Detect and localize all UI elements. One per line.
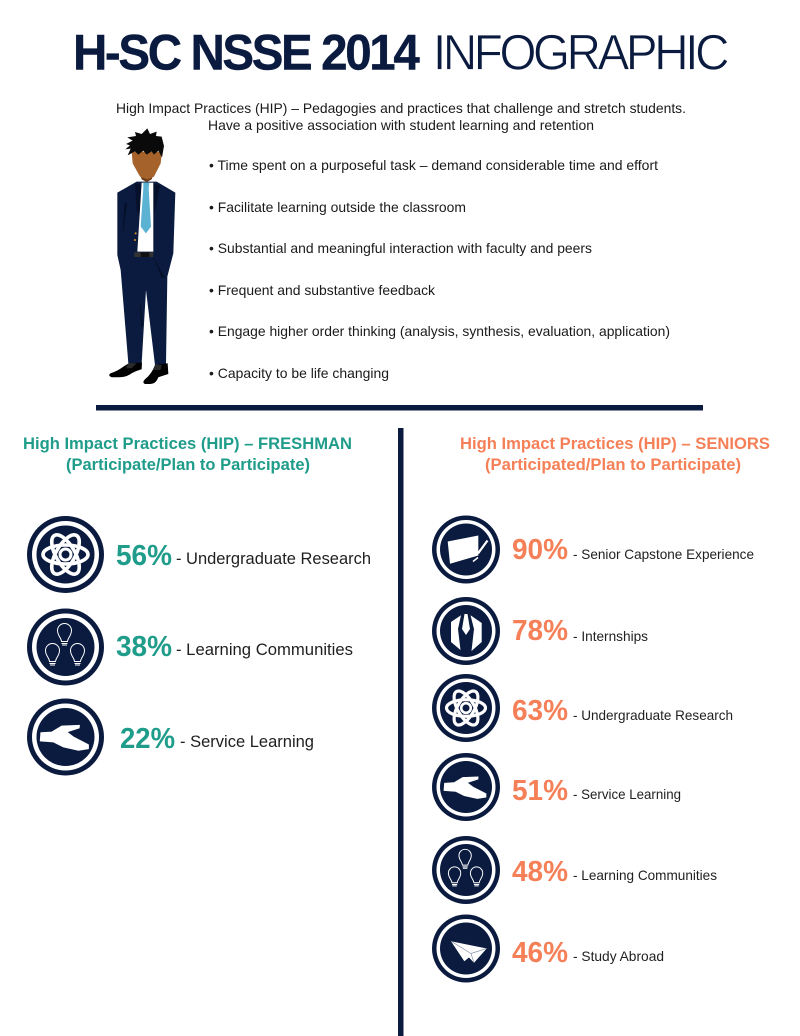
heading: freshman: (Participate/Plan to Participate) [66,456,310,474]
stat: 51% service learning [512,775,681,807]
stat: 78% internships: - Internships [573,628,648,644]
stat: 46% study abroad: - Study Abroad [573,948,664,964]
icon: hand [432,753,500,821]
intro text: High Impact Practices (HIP) – Pedagogies and practices that challenge and stretch students. [116,100,686,116]
stat: 48% learning communities [512,856,717,888]
panel: freshman [23,435,371,776]
bullet list: • Facilitate learning outside the classroom [209,199,466,215]
icon: student figure [109,128,175,384]
stat: 22% service learning: 22% [120,723,175,755]
stat: 90% senior capstone [512,534,754,566]
stat: 63% undergraduate research [512,695,733,727]
stat: 38% learning communities [116,631,353,663]
stat: 38% learning communities: 38% [116,631,172,663]
icon: paper plane [432,914,500,982]
heading: seniors: (Participated/Plan to Participate) [485,456,741,474]
title: INFOGRAPHIC [433,25,729,81]
heading: seniors: High Impact Practices (HIP) – SENIORS [460,435,770,453]
stat: 90% senior capstone: 90% [512,534,568,566]
bullet list: • Substantial and meaningful interaction with faculty and peers [209,240,592,256]
stat: 46% study abroad: 46% [512,937,568,969]
stat: 22% service learning: - Service Learning [180,732,314,751]
stat: 78% internships: 78% [512,615,568,647]
icon: hand [27,698,104,776]
stat: 48% learning communities: - Learning Communities [573,867,717,883]
bullet list: • Time spent on a purposeful task – demand considerable time and effort [209,157,658,173]
stat: 38% learning communities: - Learning Communities [176,640,353,659]
icon: light bulbs [432,836,500,904]
stat: 63% undergraduate research: - Undergraduate Research [573,707,733,723]
intro text [116,100,686,133]
bullet list [209,157,670,381]
heading: freshman [23,435,352,474]
stat: 22% service learning [120,723,314,755]
stat: 90% senior capstone: - Senior Capstone Experience [573,546,754,562]
stat: 48% learning communities: 48% [512,856,568,888]
title [73,25,729,81]
title: H-SC NSSE 2014 [73,25,420,81]
stat: 56% undergraduate research: - Undergraduate Research [176,549,371,568]
stat: 51% service learning: - Service Learning [573,786,681,802]
bullet list: • Frequent and substantive feedback [209,282,436,298]
stat: 46% study abroad [512,937,664,969]
heading: freshman: High Impact Practices (HIP) – FRESHMAN [23,435,352,453]
stat: 51% service learning: 51% [512,775,568,807]
icon: atom [27,516,104,593]
bullet list: • Capacity to be life changing [209,365,389,381]
icon: suit and tie [432,597,500,665]
icon: atom [432,674,500,742]
stat: 56% undergraduate research [116,540,371,572]
stat: 56% undergraduate research: 56% [116,540,172,572]
panel: seniors [432,435,770,982]
stat: 78% internships [512,615,648,647]
intro text: Have a positive association with student learning and retention [208,117,594,133]
heading: seniors [460,435,770,474]
stat: 63% undergraduate research: 63% [512,695,568,727]
icon: light bulbs [27,608,104,686]
bullet list: • Engage higher order thinking (analysis, synthesis, evaluation, application) [209,323,670,339]
icon: capstone map [432,516,500,584]
